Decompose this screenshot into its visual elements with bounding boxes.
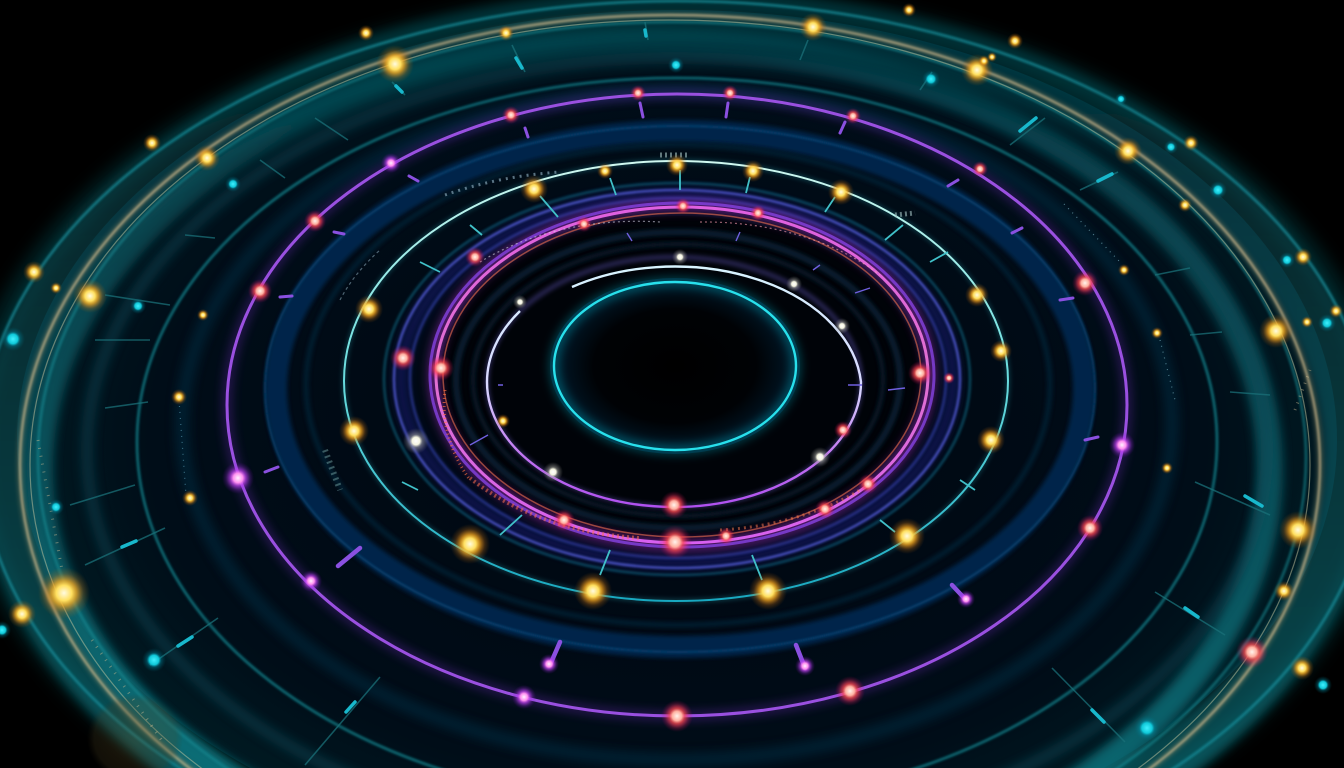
- teal white ring: [344, 161, 1008, 601]
- dim inner rings: [456, 232, 900, 528]
- teal ticks: [402, 170, 975, 580]
- purple ring: [227, 94, 1127, 716]
- nodes: inner ring: [496, 249, 852, 519]
- dark inner field: [440, 216, 920, 540]
- dark blue thick ring: [265, 126, 1095, 652]
- lens flare: [87, 694, 183, 768]
- fine data marks: [38, 155, 1310, 745]
- inner white-purple ring: [487, 257, 861, 507]
- nodes: teal white ring: [339, 154, 1012, 610]
- cyan tick dashes: [122, 30, 1262, 722]
- purple ticks: [265, 103, 1098, 668]
- inner purple ticks: [470, 232, 905, 445]
- center cyan ring: [554, 282, 796, 450]
- pink purple ring: [430, 203, 934, 547]
- nodes: pink ring: [390, 198, 955, 559]
- nodes: purple ring: [222, 85, 1268, 732]
- center disc: [550, 278, 800, 454]
- blue ring: [384, 183, 970, 575]
